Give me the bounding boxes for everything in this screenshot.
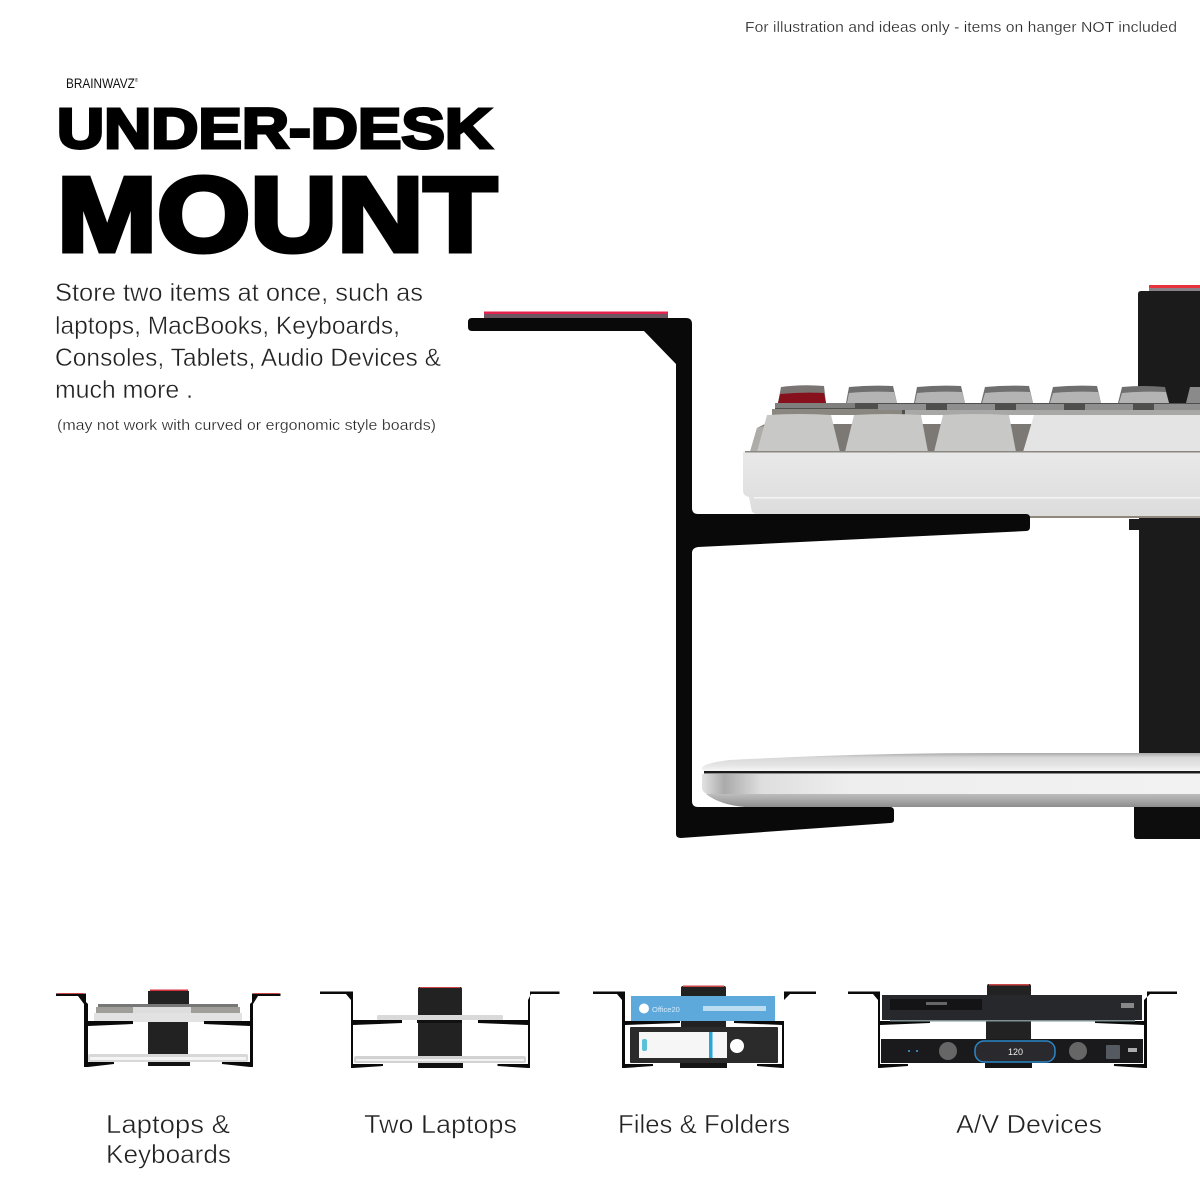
disclaimer note: For illustration and ideas only - items on hanger NOT included xyxy=(745,19,1177,36)
label: laptops and keyboards: Keyboards xyxy=(106,1139,231,1169)
keyboard case xyxy=(743,452,1200,517)
title line one: UNDER-DESK xyxy=(57,97,492,161)
brackets xyxy=(56,994,133,1067)
post xyxy=(986,984,1031,1039)
keyboard well xyxy=(750,424,1200,452)
thumbnail: laptops and keyboards xyxy=(56,990,280,1067)
blue box: Office20 xyxy=(652,1005,680,1014)
description: Consoles, Tablets, Audio Devices & xyxy=(55,344,441,372)
steel bracket xyxy=(468,318,1030,838)
label: laptops and keyboards: Laptops & xyxy=(106,1109,230,1139)
lower laptop xyxy=(354,1056,526,1063)
laptop xyxy=(702,753,1200,807)
keyboard xyxy=(94,1004,242,1022)
keyboard xyxy=(743,385,1200,518)
brand logo: BRAINWAVZ xyxy=(66,75,148,91)
blue box xyxy=(631,996,775,1021)
brackets xyxy=(320,992,402,1068)
label: two laptops: Two Laptops xyxy=(364,1109,517,1139)
post xyxy=(418,987,462,1056)
black binder xyxy=(630,1027,778,1063)
power conditioner: 120 xyxy=(1008,1047,1023,1057)
brackets xyxy=(848,992,930,1068)
label: files and folders: Files & Folders xyxy=(618,1109,790,1139)
brand logo: ® xyxy=(135,77,138,84)
description: much more . xyxy=(55,376,193,404)
bracket adhesive pad xyxy=(484,312,668,318)
title line two: MOUNT xyxy=(57,156,497,274)
post xyxy=(148,991,189,1054)
label: av devices: A/V Devices xyxy=(956,1109,1102,1139)
power conditioner xyxy=(881,1039,1143,1063)
post xyxy=(681,986,726,1027)
centre post xyxy=(1129,285,1200,839)
upper laptop xyxy=(377,1015,503,1020)
brackets xyxy=(593,992,680,1068)
description xyxy=(55,279,441,404)
label: laptops and keyboards xyxy=(106,1109,231,1169)
thumbnail: av devices xyxy=(848,984,1177,1068)
title xyxy=(57,97,497,274)
compatibility note: (may not work with curved or ergonomic style boards) xyxy=(57,417,436,434)
thumbnail: two laptops xyxy=(320,987,560,1068)
second key row xyxy=(772,403,1200,415)
description: laptops, MacBooks, Keyboards, xyxy=(55,312,400,340)
thumbnail: files and folders xyxy=(593,986,816,1068)
laptop xyxy=(88,1054,248,1062)
blu-ray player xyxy=(882,995,1142,1022)
main product image xyxy=(468,285,1200,839)
front keys xyxy=(757,414,1200,452)
top key row xyxy=(778,385,1200,403)
description: Store two items at once, such as xyxy=(55,279,423,307)
